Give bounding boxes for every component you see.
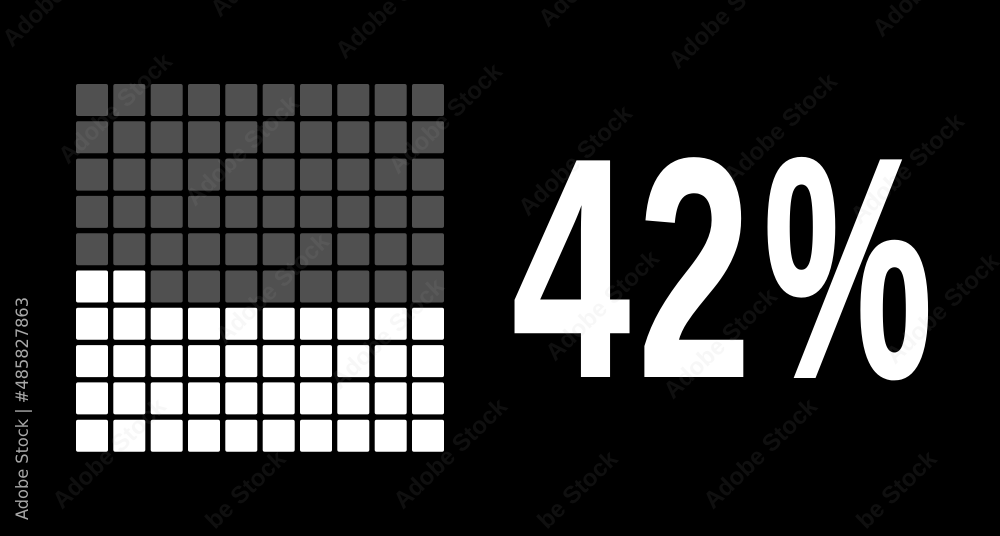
- big percentage figure: 2: [638, 94, 751, 442]
- side credit text: Adobe Stock | #485827863: [13, 297, 33, 520]
- watermark overlay: Adobe Stock: [53, 48, 178, 169]
- watermark overlay: be Stock: [851, 445, 943, 534]
- watermark overlay: Adobe Stock: [388, 393, 513, 514]
- big percentage figure: 4: [512, 93, 631, 443]
- watermark overlay: Adobe Stock: [718, 68, 843, 189]
- watermark overlay: Adobe Stock: [210, 228, 335, 349]
- watermark overlay: be Stock: [532, 445, 624, 534]
- watermark overlay: Adobe Stock: [180, 90, 305, 211]
- watermark overlay: be Stock: [200, 445, 292, 534]
- watermark overlay: Adobe Stock: [513, 100, 638, 221]
- unfilled squares (58): [76, 84, 444, 302]
- waffle chart: 42 of 100 squares filled: [76, 84, 444, 452]
- watermark overlay: Adobe Stock: [540, 245, 665, 366]
- big percentage figure: %: [764, 94, 932, 443]
- watermark overlay: Adobe Stock: [325, 273, 450, 394]
- watermark overlay: Adobe Stock: [698, 393, 823, 514]
- watermark overlay: Adobe Stock: [383, 58, 508, 179]
- watermark overlay: Adobe Stock: [47, 393, 172, 514]
- filled squares (42): [76, 270, 444, 452]
- watermark overlay: Adobe Stock: [845, 108, 970, 229]
- watermark overlay: Adobe Stock: [658, 283, 783, 404]
- big percentage figure: [512, 93, 932, 443]
